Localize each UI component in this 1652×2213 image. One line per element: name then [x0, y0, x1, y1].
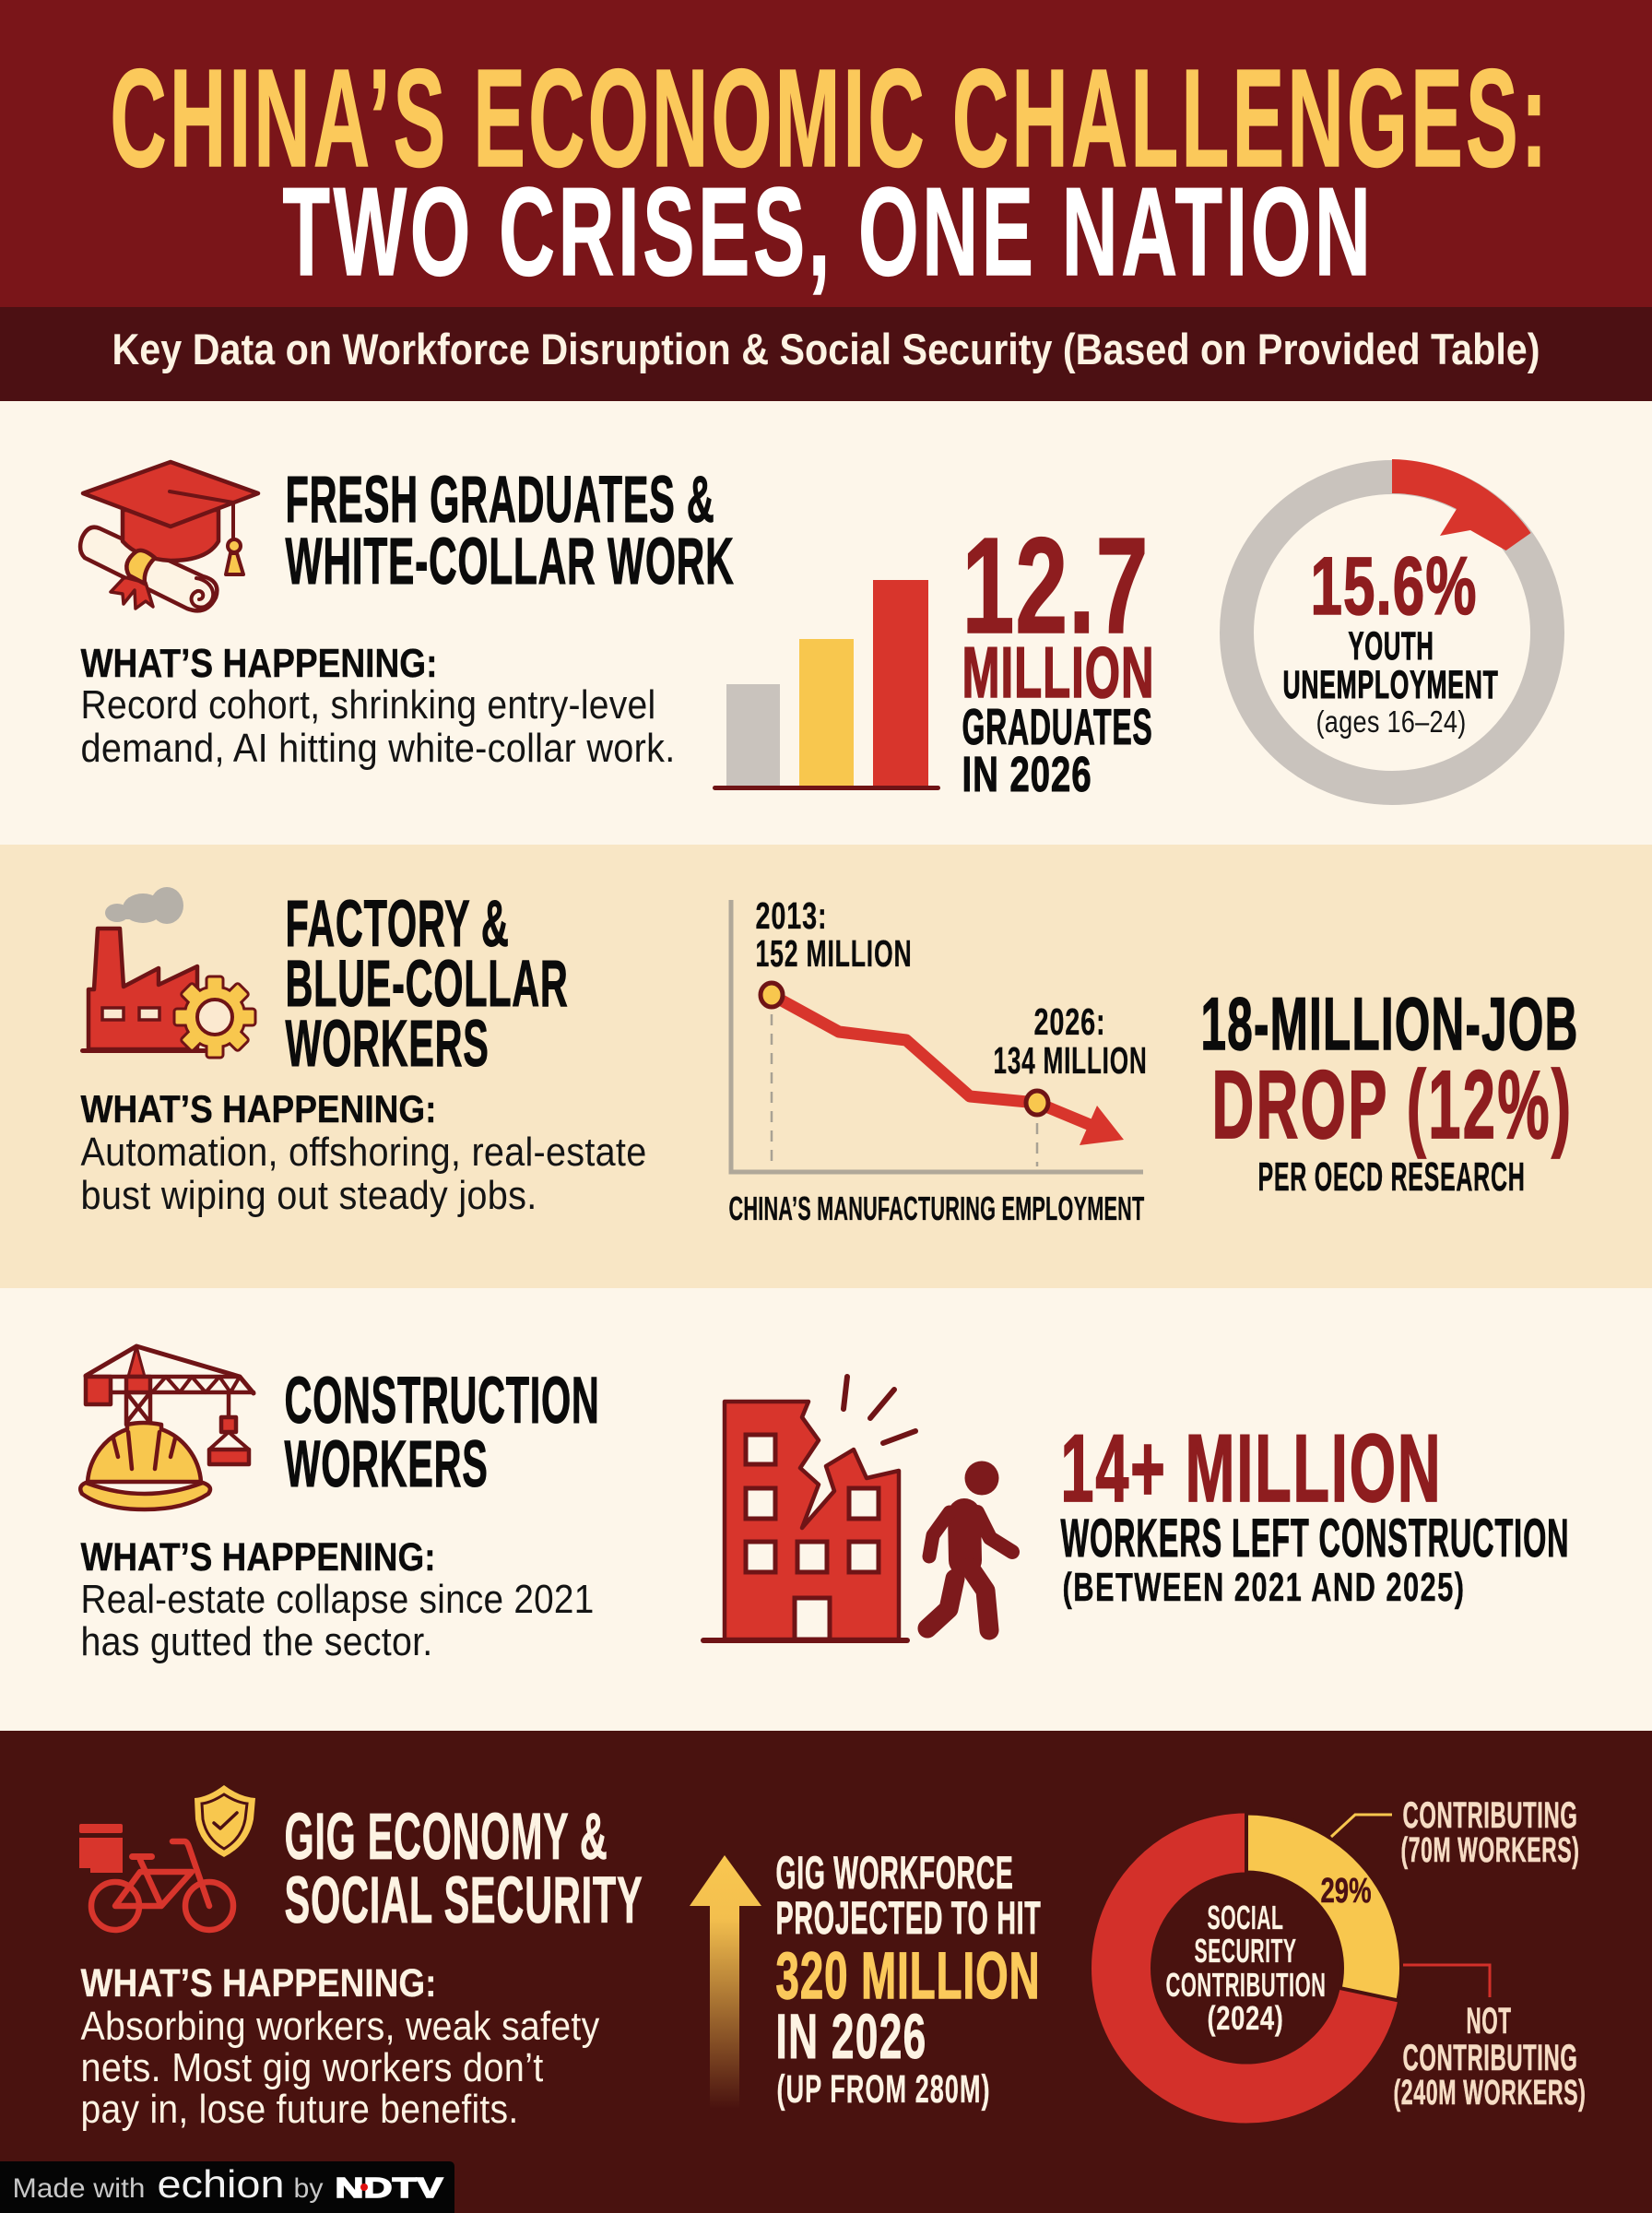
arrow: gig workforce growth	[690, 1855, 761, 2109]
line chart: manufacturing employment: CHINA’S MANUFACTURING EMPLOYMENT	[728, 1189, 1145, 1227]
text block: what's happening: Record cohort, shrinking entry-level	[81, 682, 656, 728]
heading: WORKERS	[286, 1008, 489, 1081]
donut chart: youth unemployment	[1237, 459, 1547, 787]
text block: what's happening: demand, AI hitting white-collar work.	[81, 726, 675, 771]
stat: 14+ million: (BETWEEN 2021 AND 2025)	[1062, 1565, 1466, 1610]
stat: gig workforce 320 million: IN 2026	[776, 2001, 927, 2072]
text block: what's happening: nets. Most gig workers don’t	[81, 2045, 544, 2090]
icon: delivery bike and shield	[79, 1785, 255, 1930]
stat: gig workforce 320 million: 320 MILLION	[776, 1940, 1040, 2013]
text block: what's happening: WHAT’S HAPPENING:	[81, 1961, 437, 2006]
donut chart: youth unemployment: UNEMPLOYMENT	[1283, 663, 1499, 707]
text block: what's happening	[81, 1535, 594, 1664]
line chart: manufacturing employment: 2026:	[1034, 1000, 1106, 1043]
stat: gig workforce 320 million: (UP FROM 280M)	[776, 2067, 990, 2112]
donut chart: social security contribution: (2024)	[1208, 1999, 1283, 2037]
callout: not contributing: NOT	[1466, 2001, 1512, 2041]
donut chart: youth unemployment: 15.6%	[1311, 539, 1477, 632]
donut chart: social security contribution: 29%	[1320, 1872, 1372, 1911]
text block: what's happening: WHAT’S HAPPENING:	[81, 1087, 437, 1130]
title	[111, 40, 1551, 302]
donut chart: social security contribution: SECURITY	[1195, 1932, 1296, 1970]
heading: GIG ECONOMY &	[284, 1801, 608, 1874]
heading	[284, 1365, 599, 1501]
heading: FACTORY &	[286, 888, 509, 961]
icon: graduation cap and diploma	[80, 462, 258, 610]
text block: what's happening: pay in, lose future benefits.	[81, 2087, 518, 2132]
donut chart: youth unemployment: (ages 16–24)	[1316, 704, 1466, 739]
donut chart: social security contribution: CONTRIBUTION	[1165, 1966, 1326, 2004]
heading	[284, 1801, 643, 1937]
text block: what's happening: Real-estate collapse since 2021	[81, 1577, 594, 1622]
panel: construction workers	[0, 1288, 1652, 1731]
footer: made with echion by NDTV: NDTV	[336, 2172, 443, 2204]
footer: made with echion by NDTV	[0, 2161, 454, 2213]
heading: FRESH GRADUATES &	[286, 464, 715, 537]
heading: CONSTRUCTION	[284, 1365, 599, 1438]
stat: 12.7 million graduates: GRADUATES	[962, 698, 1152, 755]
text block: what's happening: has gutted the sector.	[81, 1619, 433, 1664]
donut chart: social security contribution: SOCIAL	[1208, 1899, 1283, 1936]
callout: contributing	[1331, 1795, 1580, 1870]
stat: 12.7 million graduates	[962, 510, 1154, 802]
icon: crane and hard hat	[80, 1346, 254, 1509]
bar chart	[713, 580, 940, 790]
heading	[286, 464, 734, 598]
icon: collapsing building	[701, 1377, 915, 1643]
heading: BLUE-COLLAR	[286, 948, 568, 1021]
line chart: manufacturing employment	[728, 894, 1147, 1227]
donut chart: youth unemployment: YOUTH	[1348, 624, 1434, 669]
text block: what's happening	[81, 1087, 647, 1218]
line chart: manufacturing employment: 152 MILLION	[756, 932, 913, 975]
heading	[286, 888, 568, 1081]
icon: person walking away	[927, 1461, 1012, 1630]
panel: gig economy	[0, 1731, 1652, 2213]
text block: what's happening: bust wiping out steady jobs.	[81, 1173, 537, 1218]
stat: gig workforce 320 million	[776, 1847, 1042, 2112]
stat: 18-million-job drop	[1200, 983, 1578, 1200]
heading: SOCIAL SECURITY	[284, 1864, 643, 1937]
stat: 12.7 million graduates: MILLION	[962, 632, 1154, 713]
text block: what's happening: WHAT’S HAPPENING:	[81, 1535, 435, 1580]
heading: WORKERS	[284, 1428, 489, 1501]
text block: what's happening: WHAT’S HAPPENING:	[81, 641, 437, 686]
text block: what's happening: Automation, offshoring, real-estate	[81, 1130, 647, 1175]
text block: what's happening: Absorbing workers, weak safety	[81, 2004, 599, 2049]
footer: made with echion by NDTV: Made with	[13, 2173, 146, 2204]
stat: 12.7 million graduates: 12.7	[962, 510, 1149, 662]
icon: factory and gear	[80, 887, 255, 1058]
donut chart: social security contribution	[1121, 1813, 1401, 2093]
stat: 12.7 million graduates: IN 2026	[962, 747, 1092, 802]
footer: made with echion by NDTV: by	[293, 2173, 323, 2204]
stat: gig workforce 320 million: GIG WORKFORCE	[776, 1847, 1014, 1899]
panel: fresh graduates	[0, 401, 1652, 845]
heading: WHITE-COLLAR WORK	[286, 526, 734, 598]
line chart: manufacturing employment: 134 MILLION	[994, 1039, 1147, 1082]
panel: factory workers	[0, 845, 1652, 1288]
text block: what's happening	[81, 1961, 599, 2132]
line chart: manufacturing employment: 2013:	[756, 894, 828, 937]
panel: subtitle band	[0, 307, 1652, 401]
panel: header	[0, 0, 1652, 307]
stat: 14+ million	[1060, 1415, 1569, 1610]
text block: what's happening	[81, 641, 675, 771]
callout: not contributing	[1394, 1965, 1586, 2112]
footer: made with echion by NDTV: echion	[157, 2162, 284, 2206]
stat: gig workforce 320 million: PROJECTED TO HIT	[776, 1892, 1042, 1944]
